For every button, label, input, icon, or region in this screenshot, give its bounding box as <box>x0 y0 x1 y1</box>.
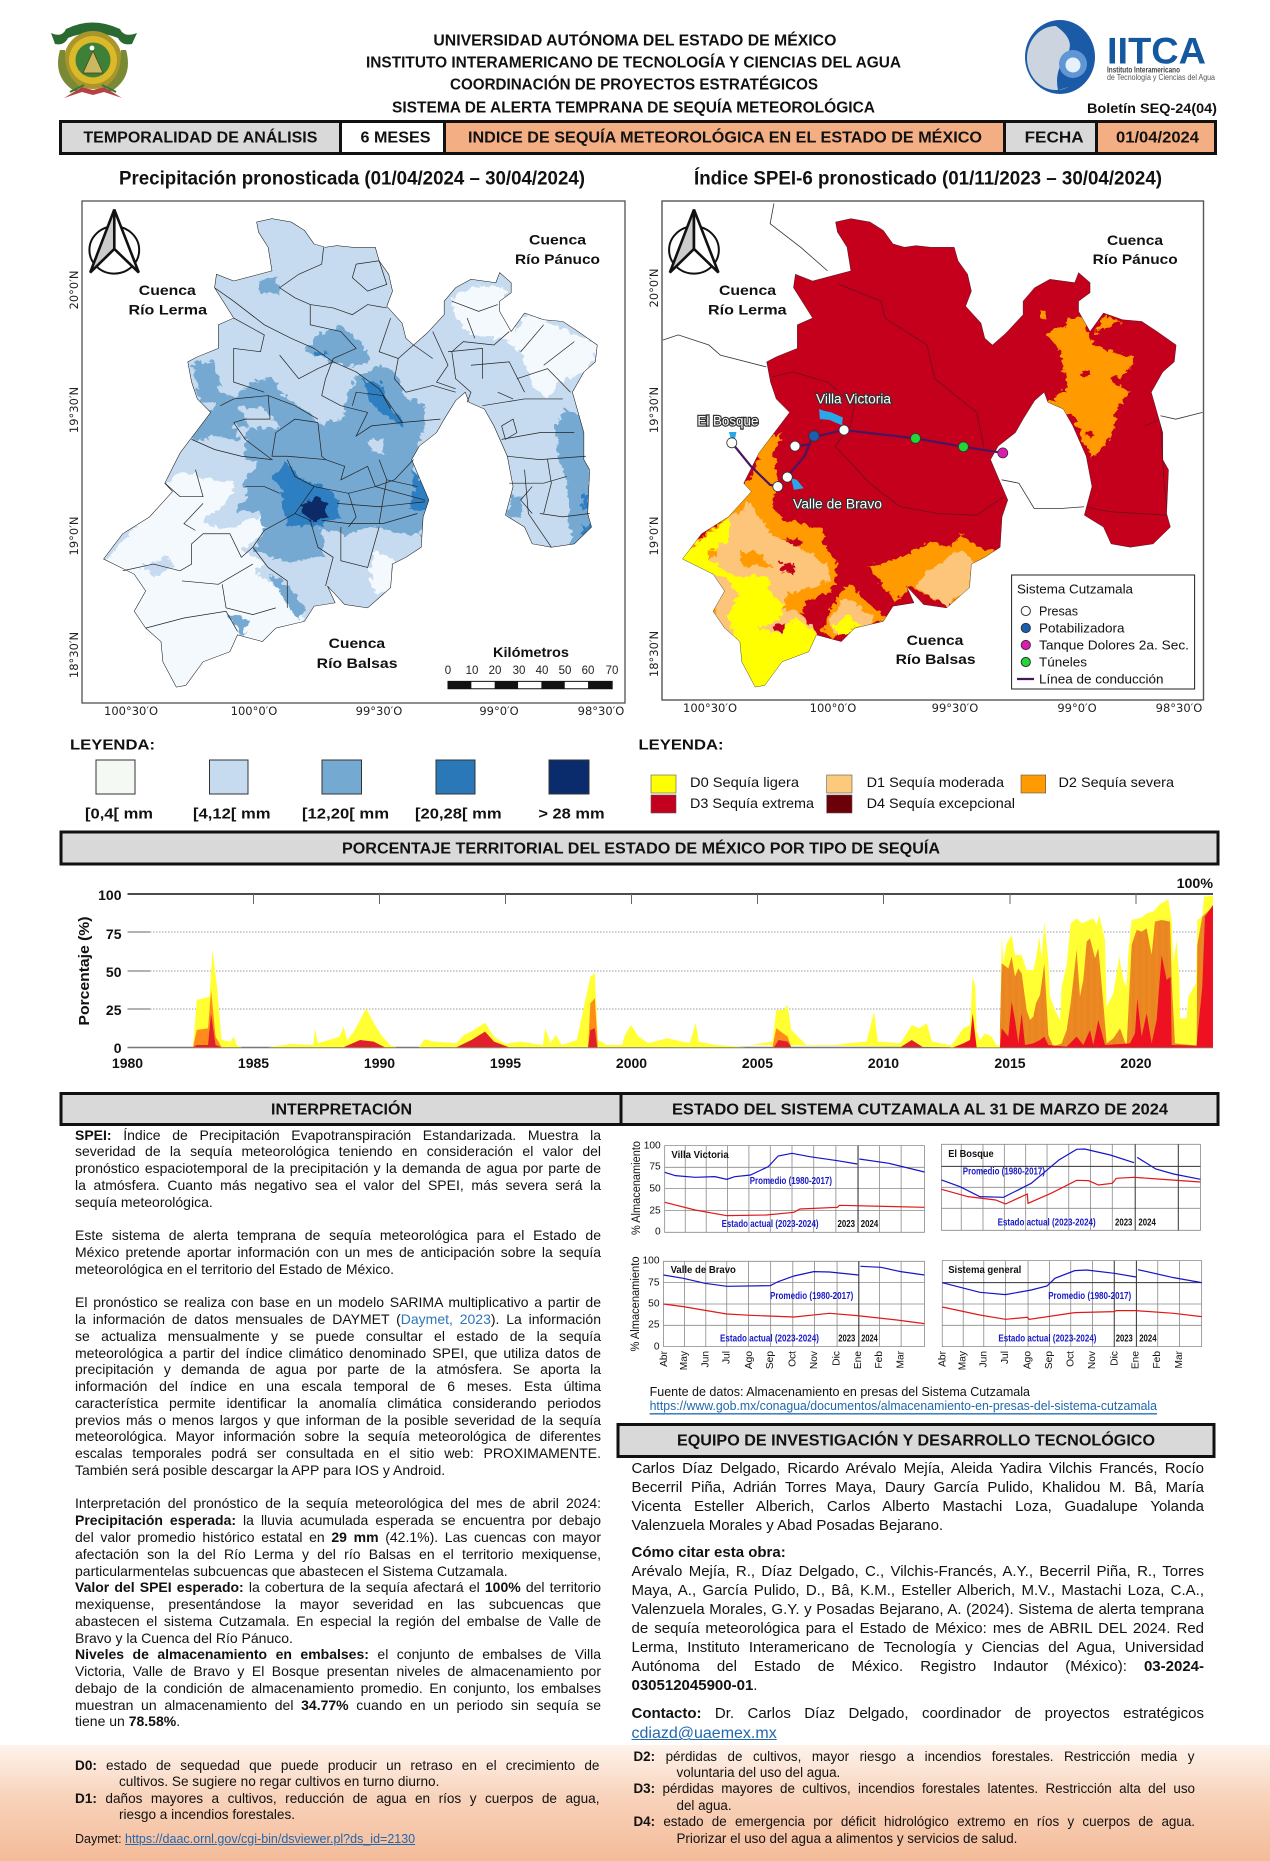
Cutzamala system markers <box>727 425 1008 492</box>
drought definitions: D0 and D1: riesgo a incendios forestales. <box>119 1807 295 1822</box>
text block: interpretation: Este sistema de alerta temprana de sequía meteorológica para el Estado de <box>75 1227 601 1243</box>
map: SPEI-6 <box>647 201 1204 715</box>
chart: Valle de Bravo: Sep <box>765 1351 776 1369</box>
chart axis labels: 25 <box>106 1002 122 1018</box>
map legend: Sistema Cutzamala: Tanque Dolores 2a. Sec. <box>1039 638 1189 652</box>
chart: Valle de Bravo: 75 <box>648 1278 660 1288</box>
map axis labels: 18°30′N <box>647 631 661 677</box>
scale numbers: 20 <box>489 665 501 677</box>
map legend: Sistema Cutzamala: Túneles <box>1039 654 1088 670</box>
chart axis labels: 100 <box>98 887 122 903</box>
legend: drought categories: D0 Sequía ligera <box>690 774 799 790</box>
chart axis labels: 2005 <box>742 1055 773 1071</box>
legend: precipitation: [4,12[ mm <box>193 806 270 822</box>
legend: precipitation <box>70 736 605 822</box>
chart: Valle de Bravo: Estado actual (2023-2024) <box>720 1333 819 1345</box>
scale numbers: 30 <box>513 665 525 677</box>
chart: Villa Victoria: Villa Victoria <box>671 1149 729 1161</box>
map axis labels: 19°0′N <box>67 517 81 555</box>
section bar: research team: EQUIPO DE INVESTIGACIÓN Y DESARROLLO TECNOLÓGICO <box>677 1430 1155 1450</box>
legend: drought categories: D4 Sequía excepcional <box>867 795 1015 811</box>
chart axis labels: 2010 <box>868 1055 899 1071</box>
neighbouring basin boundaries <box>663 203 1203 508</box>
text block: interpretation: Bravo y la Cuenca del Río Pánuco. <box>75 1630 293 1646</box>
chart: Sistema general: Ago <box>1022 1351 1034 1369</box>
basin labels: Río Pánuco <box>515 251 600 267</box>
legend: precipitation: [12,20[ mm <box>302 806 389 822</box>
text block: interpretation: debajo de la condición de almacenamiento promedio. En conjunto, los embalses <box>75 1680 601 1696</box>
charts: Cutzamala storage <box>630 1140 1202 1370</box>
header table <box>59 120 1217 155</box>
basin labels: Kilómetros <box>493 644 569 660</box>
text block: interpretation: sequía meteorológica. <box>75 1194 213 1210</box>
text block: team, citation, contact: Arévalo Mejía, R., Díaz Delgado, C., Vilchis-Francés, A.Y., Becerril Piña, R., Torres <box>632 1563 1204 1580</box>
chart: El Bosque: El Bosque <box>948 1148 994 1160</box>
basin labels: Río Pánuco <box>1093 251 1178 267</box>
basin labels <box>708 232 1178 667</box>
map axis labels: 100°30′O <box>104 704 158 718</box>
chart: Villa Victoria: 75 <box>649 1162 661 1172</box>
chart: Valle de Bravo <box>630 1256 924 1370</box>
text block: interpretation: tiene un 78.58%. <box>75 1713 180 1729</box>
chart: Villa Victoria: 25 <box>649 1206 661 1216</box>
header table: INDICE DE SEQUÍA METEOROLÓGICA EN EL ESTADO DE MÉXICO <box>468 128 982 146</box>
bulletin number: Boletín SEQ-24(04) <box>1087 100 1217 116</box>
basin labels: Cuenca <box>907 632 964 648</box>
chart: Sistema general: Promedio (1980-2017) <box>1048 1290 1131 1302</box>
chart: Sistema general: Jul <box>1000 1351 1011 1364</box>
text block: team, citation, contact: Vicenta Esteller Alberich, Carlos Alberto Mastachi Loza, Guadalupe Yolanda <box>632 1498 1204 1515</box>
text block: interpretation: la atmósfera. Cuanto más negativo sea el valor del SPEI, más severa será la <box>75 1177 601 1193</box>
chart: Villa Victoria: 50 <box>649 1184 661 1194</box>
map axis labels: 98°30′O <box>578 704 624 718</box>
chart: Valle de Bravo: Feb <box>874 1351 885 1369</box>
text block: interpretation: se actualiza mensualmente y se puede consultar el estado de la sequía <box>75 1328 601 1344</box>
text block: interpretation: Victoria, Valle de Bravo y El Bosque presentan niveles de almacenamiento por <box>75 1663 601 1679</box>
text block: interpretation: Interpretación del pronóstico de la sequía meteorológica del mes de abril 2024: <box>75 1495 601 1511</box>
text block: interpretation: meteorológica en el territorio del Estado de México. <box>75 1261 394 1277</box>
text block: interpretation: severidad de la sequía meteorológica teniendo en consideración el valor del <box>75 1143 601 1159</box>
heading: SPEI map: Índice SPEI-6 pronosticado (01/11/2023 – 30/04/2024) <box>694 168 1162 190</box>
data source note: Fuente de datos: Almacenamiento en presas del Sistema Cutzamala <box>650 1384 1031 1399</box>
chart: Sistema general: Jun <box>978 1351 989 1367</box>
chart: Valle de Bravo: 100 <box>642 1256 660 1266</box>
chart: El Bosque <box>941 1144 1200 1230</box>
chart: Sistema general <box>938 1261 1202 1370</box>
map axis labels: 99°30′O <box>932 701 978 715</box>
basin labels: Cuenca <box>529 232 586 248</box>
chart: Valle de Bravo: 50 <box>648 1298 660 1310</box>
chart axis labels: 2000 <box>616 1055 647 1071</box>
map axis labels: 99°30′O <box>356 704 402 718</box>
text block: team, citation, contact: Valenzuela Morales, G.Y. y Posadas Bejarano, A. (2024). Sistema de alerta temprana <box>632 1601 1204 1618</box>
chart: Valle de Bravo: Valle de Bravo <box>671 1264 736 1276</box>
drought definitions: D2, D3 and D4: D3: pérdidas mayores de cultivos, incendios forestales latentes. Restricción alta del uso <box>634 1781 1195 1796</box>
section bar: Cutzamala state: ESTADO DEL SISTEMA CUTZAMALA AL 31 DE MARZO DE 2024 <box>672 1102 1168 1118</box>
basin labels: Cuenca <box>719 282 776 298</box>
basin labels: Río Lerma <box>128 302 207 318</box>
reservoir labels: Villa Victoria <box>816 392 891 406</box>
chart: Valle de Bravo: Jul <box>721 1351 732 1364</box>
map legend: Sistema Cutzamala <box>1012 575 1195 689</box>
chart: El Bosque: Estado actual (2023-2024) <box>998 1217 1096 1229</box>
text block: interpretation: previos más o menos largos y que informan de la posible severidad de la sequía <box>75 1412 601 1428</box>
legend: precipitation: [0,4[ mm <box>85 806 153 822</box>
map axis labels: 18°30′N <box>67 632 81 678</box>
map axis labels: 20°0′N <box>67 271 81 309</box>
drought definitions: D2, D3 and D4: voluntaria del uso del agua. <box>676 1765 840 1780</box>
chart: El Bosque: 2023 <box>1115 1217 1133 1229</box>
chart: Valle de Bravo: Oct <box>787 1351 798 1367</box>
icon: north arrow <box>89 210 139 274</box>
chart: Valle de Bravo: % Almacenamiento <box>630 1256 642 1352</box>
text block: interpretation: escalas temporales podrá ser consultada en el sitio web: PROXIMAMENTE. <box>75 1445 601 1461</box>
legend: drought categories: D1 Sequía moderada <box>867 774 1004 790</box>
section bar: territorial percentage <box>61 832 1218 864</box>
map axis labels: 19°30′N <box>647 387 661 433</box>
chart: Villa Victoria <box>631 1140 924 1238</box>
chart: Valle de Bravo: 2023 <box>838 1333 855 1345</box>
text block: interpretation: meteorológica. Mayor información sobre la sequía meteorológica de diferentes <box>75 1428 601 1444</box>
text block: interpretation: característica permite identificar la anomalía climática considerando periodos <box>75 1395 601 1411</box>
chart: Sistema general: Ene <box>1130 1351 1142 1369</box>
map axis labels: 98°30′O <box>1156 701 1202 715</box>
chart: Villa Victoria: 2024 <box>861 1218 878 1230</box>
chart: Valle de Bravo: 25 <box>648 1320 660 1330</box>
drought definitions: D2, D3 and D4: D2: pérdidas de cultivos, mayor riesgo a incendios forestales. Restricción media y <box>634 1748 1194 1764</box>
text block: interpretation: muestran un almacenamiento del 34.77% cuando en un periodo sin sequía se <box>75 1697 601 1713</box>
chart: Sistema general: Mar <box>1174 1350 1185 1369</box>
text block: interpretation: particularmentelas subcuencas que abastecen el Sistema Cutzamala. <box>75 1562 508 1578</box>
chart: Villa Victoria: 100 <box>644 1140 661 1152</box>
text block: team, citation, contact: Carlos Díaz Delgado, Ricardo Arévalo Mejía, Aleida Yadira Vilchis Francés, Rocío <box>632 1460 1204 1477</box>
chart axis labels: 1985 <box>238 1055 269 1071</box>
reservoir labels: El Bosque <box>697 414 758 428</box>
title block: UNIVERSIDAD AUTÓNOMA DEL ESTADO DE MÉXICO <box>433 30 836 50</box>
chart axis labels: 1995 <box>490 1055 521 1071</box>
text block: interpretation: información del índice en una escala temporal de 6 meses. Esta última <box>75 1378 601 1394</box>
text block: team, citation, contact: Becerril Piña, Adrián Torres Maya, Daury García Pulido, Khalidou M. Bâ, María <box>632 1479 1204 1496</box>
map axis labels <box>67 271 624 718</box>
chart: Valle de Bravo: 0 <box>654 1342 660 1352</box>
scale numbers: 40 <box>536 665 548 677</box>
drought definitions: D0 and D1: D1: daños mayores a cultivos, reducción de agua en ríos y cuerpos de agua, <box>75 1791 600 1806</box>
chart axis labels: 2015 <box>994 1055 1026 1071</box>
municipal boundaries <box>123 247 590 631</box>
legend: drought categories <box>638 736 1174 813</box>
drought definitions: D0 and D1: cultivos. Se sugiere no regar cultivos en turno diurno. <box>119 1774 439 1789</box>
header table: 01/04/2024 <box>1116 130 1199 146</box>
map axis labels: 20°0′N <box>647 269 661 307</box>
text block: interpretation: SPEI: Índice de Precipitación Evapotranspiración Estandarizada. Muestra la <box>75 1127 601 1143</box>
text block: team, citation, contact: 030512045900-01. <box>632 1677 757 1694</box>
map legend: Sistema Cutzamala: Potabilizadora <box>1039 620 1125 636</box>
map axis labels: 99°0′O <box>1057 701 1097 715</box>
chart axis labels: 1980 <box>112 1055 143 1071</box>
basin labels: Río Lerma <box>708 302 787 318</box>
footer gradient band <box>0 1745 1270 1861</box>
map axis labels: 19°0′N <box>647 517 661 555</box>
chart axis labels: 100% <box>1177 875 1214 891</box>
scale numbers <box>445 665 618 677</box>
drought definitions: D0 and D1: D0: estado de sequedad que puede producir un retraso en el crecimiento de <box>75 1758 600 1773</box>
drought definitions: D2, D3 and D4: D4: estado de emergencia por déficit hidrológico extremo en ríos y cuerpos de agua. <box>634 1814 1195 1829</box>
text block: interpretation: pronóstico espaciotemporal de la precipitación y la demanda de agua por parte de <box>75 1160 601 1176</box>
data source note <box>650 1384 1158 1413</box>
text block: interpretation: precipitación y demanda de agua por parte de la atmósfera. Se aporta la <box>75 1361 601 1377</box>
basin labels: Río Balsas <box>317 655 398 671</box>
text block: interpretation: mexiquense, presentándose la mayor severidad en las subcuencas que <box>75 1596 601 1612</box>
text block: interpretation: del valor promedio histórico estatal en 29 mm (42.1%). Las cuencas con mayor <box>75 1529 601 1545</box>
logo: IITCA <box>1025 20 1215 94</box>
chart: Villa Victoria: Estado actual (2023-2024) <box>722 1218 818 1230</box>
map axis labels <box>647 269 1202 715</box>
chart: Valle de Bravo: Ago <box>744 1351 755 1369</box>
legend: drought categories: D2 Sequía severa <box>1058 774 1174 790</box>
chart: Valle de Bravo: 2024 <box>861 1333 878 1345</box>
chart axis labels: 2020 <box>1120 1055 1152 1071</box>
chart: drought percentage 1980-2023 <box>77 875 1214 1071</box>
chart: Sistema general: Feb <box>1152 1351 1163 1369</box>
chart: Villa Victoria: 0 <box>655 1226 661 1238</box>
section bar: interpretation: INTERPRETACIÓN <box>271 1100 412 1118</box>
text block: interpretation: Valor del SPEI esperado: la cobertura de la sequía afectará el 100% del territorio <box>75 1579 601 1595</box>
text block: interpretation: México pretende aportar información con un mes de anticipación sobre la sequía <box>75 1244 601 1260</box>
legend: drought categories: D3 Sequía extrema <box>690 795 814 811</box>
chart: Valle de Bravo: Ene <box>853 1351 864 1369</box>
chart axis labels: 0 <box>114 1040 122 1056</box>
chart: Valle de Bravo: Dic <box>832 1351 843 1366</box>
legend: drought categories: LEYENDA: <box>638 736 724 754</box>
text block: interpretation: meteorológica a partir del índice climático denominado SPEI, que utiliza datos de <box>75 1345 601 1361</box>
map axis labels: 19°30′N <box>67 387 81 433</box>
chart: Valle de Bravo: Promedio (1980-2017) <box>770 1290 853 1302</box>
chart: Sistema general: Nov <box>1087 1350 1098 1369</box>
map axis labels: 100°0′O <box>810 701 856 715</box>
text block: team, citation, contact: cdiazd@uaemex.mx <box>632 1725 777 1742</box>
chart: Valle de Bravo: Mar <box>896 1350 907 1369</box>
section bar: Cutzamala state <box>621 1094 1218 1124</box>
drought definitions: D2, D3 and D4 <box>634 1748 1195 1846</box>
data source note: https://www.gob.mx/conagua/documentos/almacenamiento-en-presas-del-sistema-cutzamala <box>650 1398 1158 1413</box>
legend: precipitation: > 28 mm <box>538 806 605 822</box>
chart: Villa Victoria: Promedio (1980-2017) <box>750 1175 832 1187</box>
logo: IITCA: Instituto Interamericano <box>1107 66 1180 74</box>
reservoir labels: Valle de Bravo <box>793 496 882 512</box>
chart: Villa Victoria: 2023 <box>838 1218 855 1230</box>
legend: precipitation: LEYENDA: <box>70 736 155 754</box>
text block: team, citation, contact: Valenzuela Morales y Abad Posadas Bejarano. <box>632 1517 943 1534</box>
map axis labels: 100°30′O <box>683 701 737 715</box>
chart: Sistema general: Sistema general <box>948 1264 1021 1276</box>
chart: Valle de Bravo: Abr <box>659 1350 670 1367</box>
legend: precipitation: [20,28[ mm <box>415 806 502 822</box>
section bar: interpretation <box>61 1094 621 1124</box>
chart: Villa Victoria: % Almacenamiento <box>631 1141 643 1235</box>
scale bar <box>448 681 612 689</box>
heading: precipitation map: Precipitación pronosticada (01/04/2024 – 30/04/2024) <box>119 168 585 190</box>
chart: Sistema general: Oct <box>1065 1351 1076 1367</box>
chart: Valle de Bravo: Nov <box>809 1350 820 1369</box>
scale numbers: 60 <box>582 665 594 677</box>
text block: interpretation: Precipitación esperada: la lluvia acumulada esperada se encuentra por debajo <box>75 1512 601 1528</box>
text block: interpretation: abastecen el sistema Cutzamala. En especial la región del embalse de Valle de <box>75 1613 601 1629</box>
title block: COORDINACIÓN DE PROYECTOS ESTRATÉGICOS <box>450 74 818 94</box>
chart axis labels: 50 <box>106 964 122 980</box>
title block: INSTITUTO INTERAMERICANO DE TECNOLOGÍA Y CIENCIAS DEL AGUA <box>366 52 901 72</box>
reservoir labels <box>697 392 891 512</box>
chart: Sistema general: Sep <box>1044 1351 1055 1369</box>
text block: team, citation, contact: Contacto: Dr. Carlos Díaz Delgado, coordinador de proyectos estratégicos <box>632 1705 1204 1722</box>
drought definitions: D2, D3 and D4: del agua. <box>676 1798 732 1813</box>
text block: team, citation, contact: Maya, A., García Pulido, D., Bâ, K.M., Esteller Alberich, M.V., Mastachi Loza, C.A., <box>632 1582 1204 1599</box>
map legend: Sistema Cutzamala: Sistema Cutzamala <box>1017 582 1134 596</box>
drought series before 2014 <box>193 950 957 1047</box>
logo: IITCA: de Tecnología y Ciencias del Agua <box>1107 73 1215 82</box>
text block: interpretation: También será posible descargar la APP para IOS y Android. <box>75 1462 445 1478</box>
basin labels: Cuenca <box>139 282 196 298</box>
text block: team, citation, contact <box>632 1460 1204 1742</box>
text block: team, citation, contact: Cómo citar esta obra: <box>632 1544 786 1561</box>
chart: Sistema general: Dic <box>1110 1351 1120 1366</box>
map legend: Sistema Cutzamala: Presas <box>1039 604 1078 618</box>
scale numbers: 10 <box>466 665 478 677</box>
text block: interpretation: afectación son la del Río Lerma y del río Balsas en el territorio mexiquense, <box>75 1546 601 1562</box>
header table: 6 MESES <box>360 130 431 146</box>
chart: Sistema general: Estado actual (2023-2024) <box>998 1333 1096 1345</box>
Daymet reference: Daymet: https://daac.ornl.gov/cgi-bin/dsviewer.pl?ds_id=2130 <box>75 1832 415 1846</box>
header table: FECHA <box>1025 130 1084 146</box>
drought definitions: D0 and D1 <box>75 1758 600 1822</box>
drought series 2014-2023 <box>950 896 1213 1047</box>
scale numbers: 50 <box>559 665 571 677</box>
text block: interpretation: Niveles de almacenamiento en embalses: el conjunto de embalses de Villa <box>75 1646 601 1662</box>
reservoirs <box>729 409 843 490</box>
chart axis labels: 75 <box>106 926 122 942</box>
icon: north arrow <box>669 210 719 274</box>
basin labels: Río Balsas <box>896 651 976 667</box>
chart axis labels: 1990 <box>364 1055 395 1071</box>
basin labels: Cuenca <box>1107 232 1163 248</box>
text block: interpretation <box>75 1127 602 1729</box>
chart axis labels: Porcentaje (%) <box>77 916 93 1026</box>
map axis labels: 99°0′O <box>479 704 519 718</box>
chart: Sistema general: Abr <box>938 1350 948 1367</box>
scale numbers: 0 <box>445 665 451 677</box>
header table: TEMPORALIDAD DE ANÁLISIS <box>83 128 318 146</box>
map: forecast precipitation <box>67 201 625 718</box>
chart: Valle de Bravo: May <box>679 1350 690 1370</box>
chart: El Bosque: Promedio (1980-2017) <box>963 1166 1045 1178</box>
text block: team, citation, contact: Lerma, Instituto Interamericano de Tecnología y Ciencias del Agua, Universidad <box>632 1639 1204 1656</box>
chart: El Bosque: 2024 <box>1138 1217 1156 1229</box>
drought definitions: D2, D3 and D4: Priorizar el uso del agua a alimentos y servicios de salud. <box>676 1831 1017 1846</box>
chart: Valle de Bravo: Jun <box>700 1351 711 1367</box>
text block: team, citation, contact: Autónoma del Estado de México. Registro Indautor (México): 03-2024- <box>632 1658 1204 1675</box>
conduction line <box>732 430 1003 487</box>
text block: interpretation: El pronóstico se realiza con base en un modelo SARIMA multiplicativo a partir de <box>75 1294 601 1310</box>
chart: Sistema general: May <box>958 1350 969 1370</box>
title block: SISTEMA DE ALERTA TEMPRANA DE SEQUÍA METEOROLÓGICA <box>392 98 875 116</box>
text block: interpretation: la información de datos mensuales de DAYMET (Daymet, 2023). La información <box>75 1311 601 1327</box>
map legend: Sistema Cutzamala: Línea de conducción <box>1039 672 1164 686</box>
section bar: territorial percentage: PORCENTAJE TERRITORIAL DEL ESTADO DE MÉXICO POR TIPO DE SEQUÍA <box>342 838 940 858</box>
scale numbers: 70 <box>606 665 618 677</box>
logo: IITCA: IITCA <box>1107 30 1206 72</box>
map axis labels: 100°0′O <box>231 704 277 718</box>
chart axis labels <box>77 875 1214 1071</box>
chart: Sistema general: 2024 <box>1139 1333 1157 1345</box>
basin labels <box>128 232 600 671</box>
text block: team, citation, contact: de sequía meteorológica para el Estado de México: mes de ABRIL DEL 2024. Red <box>632 1620 1204 1637</box>
title block <box>366 30 901 116</box>
chart: Sistema general: 2023 <box>1116 1333 1133 1345</box>
section bar: research team <box>618 1424 1214 1456</box>
basin labels: Cuenca <box>329 635 385 651</box>
logo: UAEM crest <box>51 22 137 98</box>
